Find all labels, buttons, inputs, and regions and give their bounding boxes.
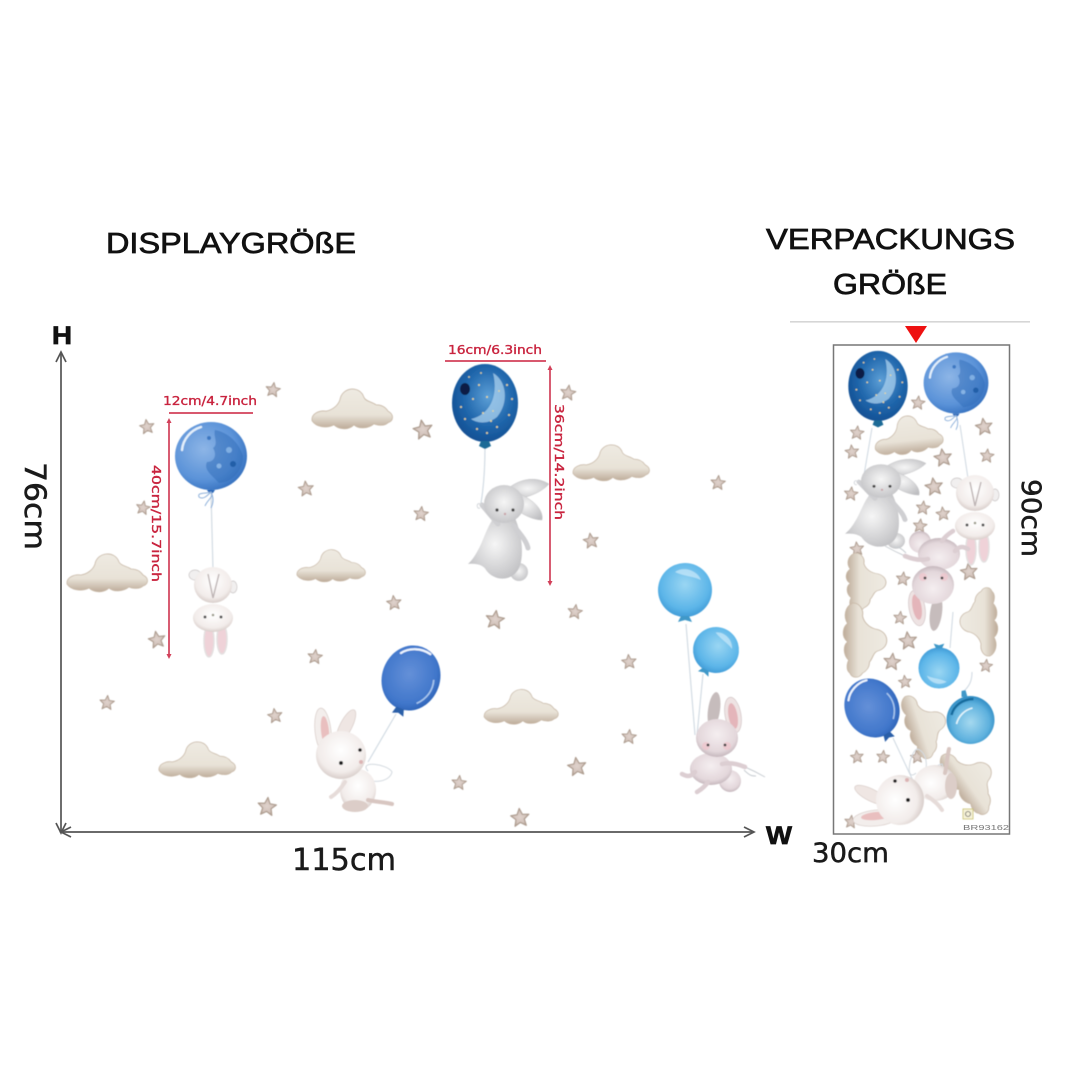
arrow: horizontal width axis [61,827,754,837]
balloon: light blue large [658,563,712,622]
annotation: 36cm height: 36cm/14.2inch [552,404,566,520]
panel: package sheet [834,345,1010,834]
bunny: pink grey [682,691,765,792]
package balloon strings [864,425,972,790]
annotation: 36cm height [548,365,566,586]
heading: package size: GRÖßE [833,269,947,301]
package bunny: grey [845,459,926,549]
axis label W: W [766,822,792,850]
annotation: 12cm width: 12cm/4.7inch [163,394,257,408]
annotation: 40cm height: 40cm/15.7inch [149,465,163,582]
dimension: 90cm: 90cm [1015,479,1046,557]
package bunny: lying white [852,749,957,828]
axis label H: H [52,322,72,350]
balloon strings [211,446,703,762]
bunny: grey holding balloon [468,479,549,581]
balloon: medium blue [370,637,450,725]
package balloon: teal [946,690,994,744]
package stars [844,395,995,828]
dimension: 30cm: 30cm [812,838,889,869]
package bunny: hanging [951,475,999,565]
package balloon: medium blue [834,668,913,752]
dimension: 76cm: 76cm [18,462,52,550]
chart: display size sticker layout [67,364,765,827]
icon: red marker triangle [905,326,927,343]
stars scattered across layout [99,381,726,827]
dimension: 115cm: 115cm [292,843,396,878]
bunny: hanging upside down [189,567,237,657]
package balloon: light blue [918,644,960,689]
heading: package size: VERPACKUNGS [766,224,1015,256]
annotation: 12cm width [163,394,257,413]
icon: brand mark [963,809,973,819]
package balloon: starry [848,351,908,427]
balloon: light blue small [683,619,747,685]
annotation: 40cm height [149,418,172,659]
annotation: 16cm width: 16cm/6.3inch [448,343,542,357]
heading: package size [766,224,1015,301]
product code: BR93162 [963,823,1009,832]
balloon: starry dark blue [452,364,518,449]
package clouds [843,412,1010,820]
clouds [67,389,649,778]
package balloon: blue moon [924,352,988,430]
arrow: vertical height axis [56,352,66,833]
package bunny: upside down pink [885,531,968,632]
balloon: blue moon [175,422,247,508]
annotation: 16cm width [445,343,546,361]
heading: display size: DISPLAYGRÖßE [106,228,356,260]
bunny: white sitting [313,707,392,812]
